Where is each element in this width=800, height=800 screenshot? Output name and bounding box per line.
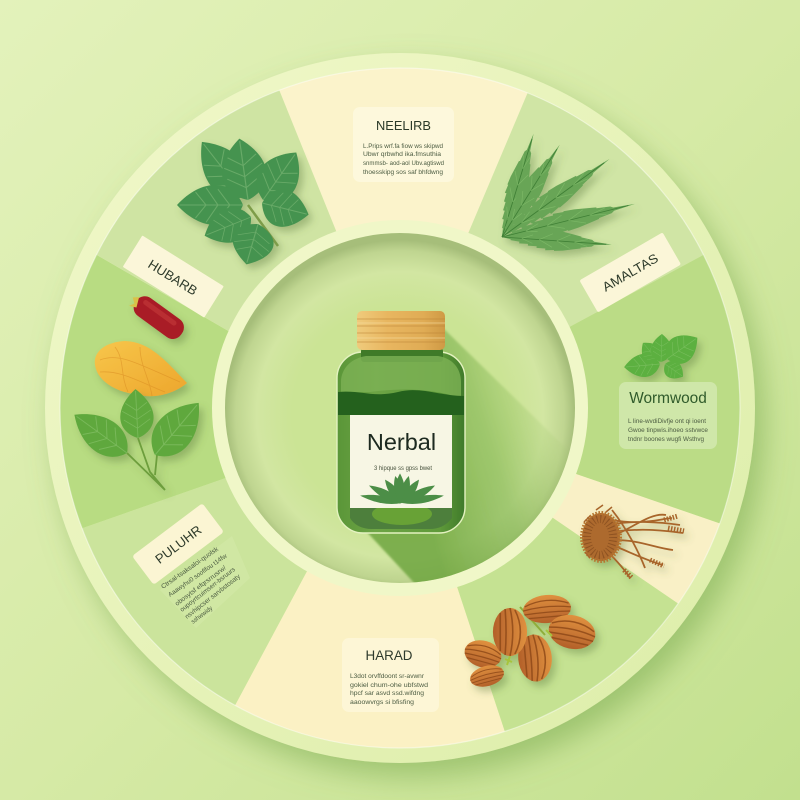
bottle label caption: 3 hipque ss gpss bwet [374,466,432,472]
segment: right darker green Wormwood [570,255,740,524]
body text: Aaawyhu0 soofifou t14fw [167,553,229,599]
body text: nsvhipcser sarvbstosaty [184,573,242,621]
label: AMALTAS: AMALTAS [600,250,661,294]
panel background [160,536,250,628]
icon: dried brown root [582,505,684,578]
panel: HARAD [342,638,439,712]
icon: mint leaves [623,326,705,384]
body text: hpcf sar asvd ssd.wifdng [350,690,424,697]
body text: L.Prips wrf.fa fiow ws skipwd [363,143,443,150]
segment: lower right green nuts [457,518,678,731]
body text [628,418,708,443]
segment: upper right green [468,93,703,326]
segment: bottom cream HARAD [236,572,504,748]
dark liquid band [338,390,464,415]
bottle [337,311,465,533]
body text: Ubwr qrbwhd ika.fmsuthia [363,151,441,158]
bottle bottom [372,503,432,525]
body text: Ctrsal-tsaksaloi-quolsk [160,545,220,591]
body text [363,143,444,176]
body text: L3dot orvffdoont sr-avwnr [350,673,425,680]
label: PULUHR [152,522,204,567]
glass highlight [341,356,461,398]
center ring [212,220,588,596]
body text: tndnr boones wugfi Wsthvg [628,436,704,443]
panel: NEELIRB [353,107,454,182]
outer ring band [45,53,755,763]
segment: top cream NEELIRB [280,68,528,233]
segment: lower right cream [553,474,720,603]
heading: NEELIRB [376,118,431,133]
bottle label [350,415,452,508]
panel: PULUHR text [132,503,250,628]
segment: upper left green [96,90,336,331]
label: HUBARB: HUBARB [145,256,200,298]
body text: sshwwidy [190,605,215,626]
bottle label title: Nerbal [367,429,436,455]
icon: yellow almond [95,341,187,396]
body text [350,673,428,706]
heading: HARAD [366,648,413,663]
heading: Wormwood [629,390,707,407]
panel background [353,107,454,182]
icon: feathery leaf [492,131,637,255]
body text [160,545,242,626]
body text: aaoowvrgs si bfisfing [350,699,414,706]
body text: obosytsf efqrsrrusrw/ [174,565,228,608]
icon: green leaf cluster [177,130,313,270]
body text: L line-wvdiDivfje ont qi ioent [628,418,706,425]
segment: lower left green PULUHR [82,478,307,705]
label: AMALTAS [579,232,681,312]
body text: oupoyrtcuimserr-bsruurs [179,566,237,614]
center circle [225,233,575,583]
bottle base glass [350,508,452,529]
panel background [619,382,717,449]
bottle long shadow [367,328,558,582]
label: HUBARB [123,235,224,318]
icon: orange nuts [461,593,598,690]
body text: thoesskipg sos saf bhfdwng [363,169,443,176]
segmented wheel [60,68,740,748]
body text: gokiel chum-ohe ubfstwd [350,682,428,689]
icon: red capsule [126,289,188,343]
panel background [342,638,439,712]
icon: three green leaves [64,388,213,490]
body text: snmmsb- aod-aol Ubv.agtiswd [363,160,444,167]
bottle label plant [360,473,444,507]
panel: Wormwood [619,382,717,449]
body text: Gwoe tinpwis.ihoeo sstvwce [628,427,708,434]
bottle body [337,352,465,533]
segment: left darker green HUBARB [60,255,228,528]
bottle neck [361,348,443,362]
bottle cap [357,311,445,350]
